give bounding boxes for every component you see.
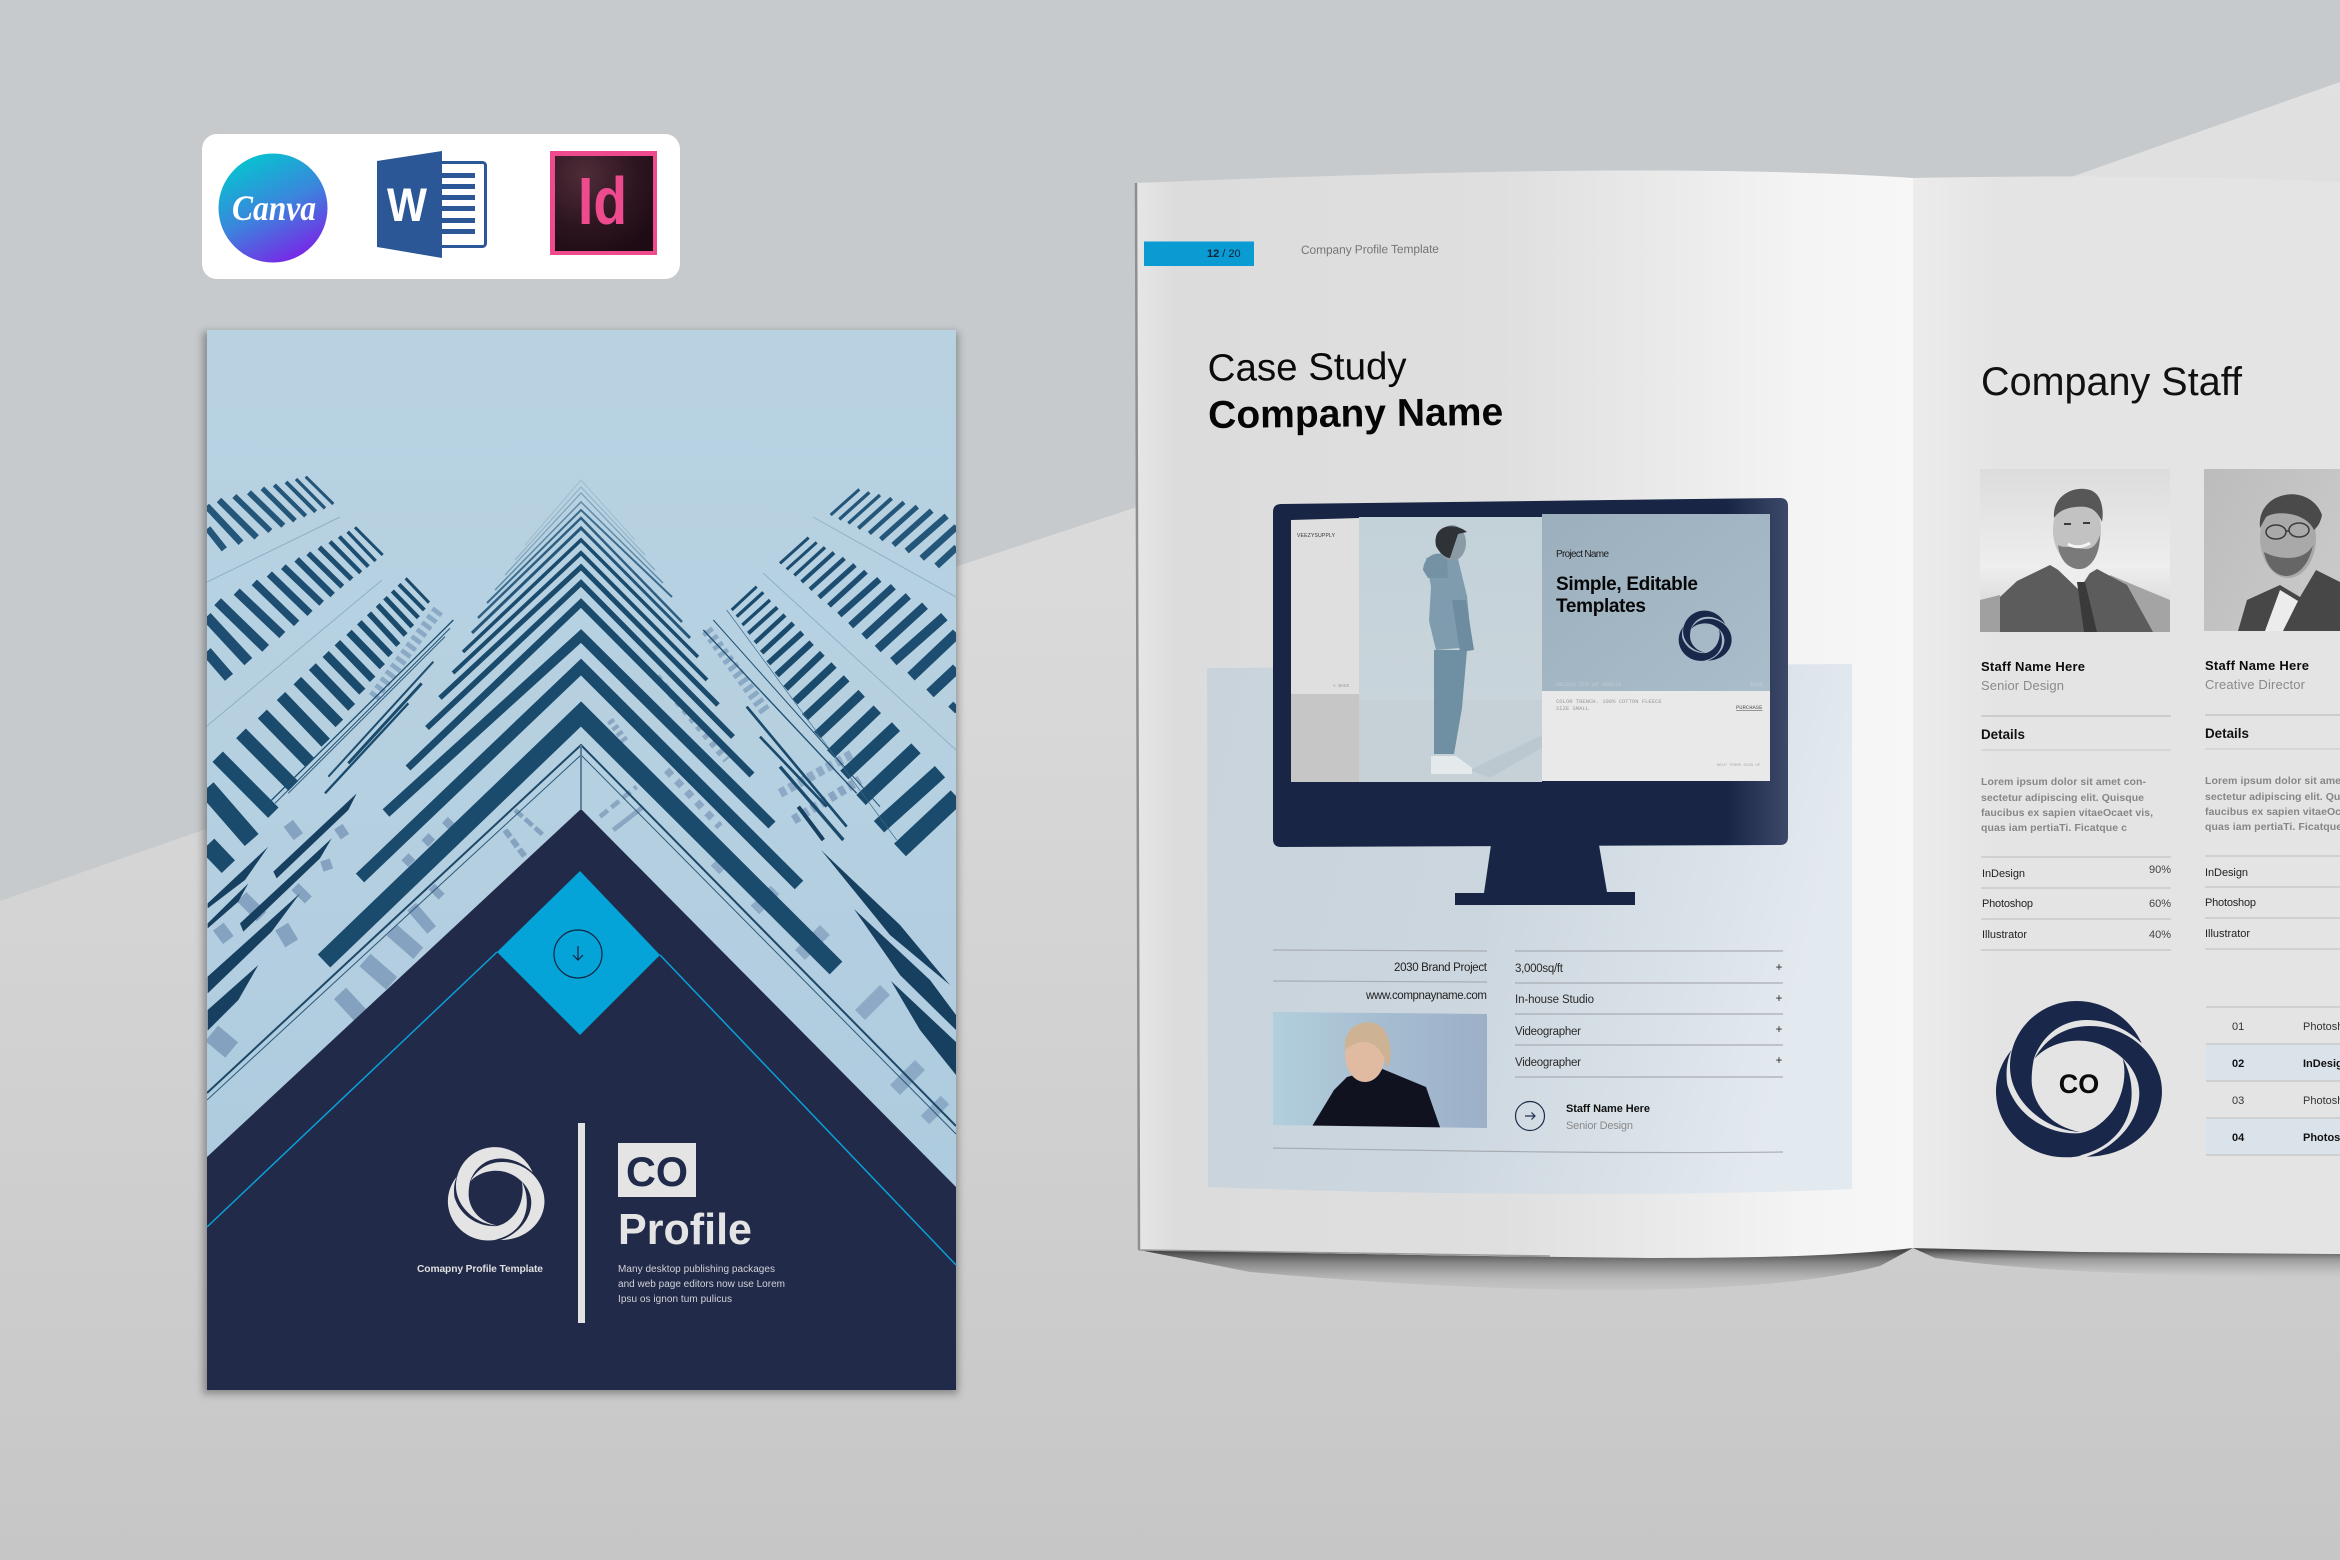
left tower windows — [207, 477, 429, 867]
facade lines — [207, 517, 956, 750]
pale blue panel — [1207, 664, 1852, 1194]
page tab: 12 / 20 — [1207, 248, 1241, 260]
staff 1 details: quas iam pertiaTi. Ficatque c — [1981, 822, 2127, 834]
right page heading: Company Staff — [1981, 360, 2243, 404]
staff credit: Staff Name Here — [1566, 1103, 1650, 1115]
spike shadows right — [821, 850, 956, 1075]
project details right column: + — [1776, 962, 1783, 974]
staff 2 skills: Illustrator — [2205, 928, 2250, 940]
heading: Case Study — [1207, 344, 1503, 437]
icon: arrow circle — [1516, 1102, 1544, 1130]
screen copy: SIZE SMALL — [1556, 705, 1589, 712]
project details right column: In-house Studio — [1515, 994, 1594, 1006]
monitor stand — [1455, 845, 1635, 905]
CO badge: CO — [626, 1148, 688, 1195]
staff 1 skills: InDesign — [1982, 868, 2025, 880]
cover shadow — [203, 332, 958, 1394]
icon: InDesign — [550, 151, 657, 255]
spike shadows left — [208, 793, 357, 1031]
panel: right page — [1913, 177, 2340, 1254]
booklet shadow — [1139, 1248, 2340, 1290]
staff table: 01 — [2232, 1021, 2244, 1033]
screen copy: PURCHASE — [1736, 704, 1763, 711]
staff 1 role: Senior Design — [1981, 678, 2064, 693]
running header: Company Profile Template — [1301, 242, 1439, 257]
staff 1 skills: 90% — [2149, 864, 2171, 876]
staff 2 details: Details — [2205, 726, 2249, 741]
page tab — [1144, 242, 1254, 266]
screen copy: HELP TERMS SIGN UP — [1717, 764, 1761, 768]
screen copy — [1297, 533, 1763, 768]
icon: Word — [377, 151, 486, 258]
screen: Project Name — [1556, 549, 1609, 560]
staff table: 02 — [2232, 1058, 2244, 1070]
staff 1 skills: 60% — [2149, 898, 2171, 910]
project details right column: Videographer — [1515, 1026, 1581, 1038]
staff 1 name: Staff Name Here — [1981, 659, 2085, 674]
heading: Case Study: Company Name — [1208, 391, 1503, 437]
lower facade window blocks left — [212, 810, 545, 1050]
screen: Simple, Editable — [1556, 574, 1698, 595]
project details left column: 2030 Brand Project — [1394, 962, 1488, 974]
right tower windows — [732, 489, 957, 850]
staff 1 details: sectetur adipiscing elit. Quisque — [1981, 792, 2144, 804]
cover tagline: Comapny Profile Template — [417, 1264, 543, 1275]
cyan lines — [207, 952, 956, 1265]
panel: left page — [1136, 171, 1913, 1258]
cover description: Many desktop publishing packages — [618, 1264, 775, 1275]
monitor — [1273, 498, 1788, 905]
staff credit: Senior Design — [1566, 1120, 1633, 1132]
small logo on screen — [1679, 611, 1732, 661]
staff table: 03 — [2232, 1095, 2244, 1107]
navy chevron — [207, 809, 956, 1390]
project details right column: Videographer — [1515, 1057, 1581, 1069]
panel: brochure cover — [207, 330, 957, 1390]
staff 1 skills: 40% — [2149, 929, 2171, 941]
project details right column: 3,000sq/ft — [1515, 963, 1564, 975]
staff 2 name: Staff Name Here — [2205, 658, 2309, 673]
staff 2 skills: InDesign — [2205, 867, 2248, 879]
screen copy: < BACK — [1333, 683, 1350, 689]
staff 2 role: Creative Director — [2205, 677, 2306, 692]
icon: InDesign: Id — [578, 164, 627, 239]
project details left column: www.compnayname.com — [1365, 990, 1487, 1002]
cover photo: skyscraper — [207, 330, 956, 1187]
project details right column: + — [1776, 993, 1783, 1005]
project details right column: + — [1776, 1055, 1783, 1067]
CO logo large: CO — [2059, 1069, 2099, 1099]
staff 2 details — [2205, 715, 2340, 833]
cover title: Profile — [618, 1205, 752, 1254]
staff credit — [1566, 1103, 1650, 1132]
staff 1 skills — [1981, 857, 2171, 950]
corner edge lines — [207, 745, 956, 1134]
staff table — [2206, 1007, 2340, 1155]
cyan diamond — [497, 871, 660, 1035]
cover description: Ipsu os ignon tum pulicus — [618, 1294, 732, 1305]
icon: Canva: Canva — [232, 188, 316, 228]
cover description: and web page editors now use Lorem — [618, 1279, 785, 1290]
central tower chevrons — [324, 480, 836, 968]
window tiles and reflections right — [600, 610, 897, 840]
staff photo 2 — [2204, 469, 2340, 631]
staff photo 1 — [1980, 469, 2170, 632]
staff 1 details: Details — [1981, 727, 2025, 742]
project photo — [1273, 1012, 1487, 1130]
icon: down arrow circle — [554, 930, 602, 978]
screen copy: UNISEX ZIP-UP HOODIE — [1556, 681, 1623, 688]
staff 1 skills: Photoshop — [1982, 898, 2033, 910]
screen copy: $368 — [1750, 681, 1763, 688]
staff 1 details — [1981, 716, 2171, 834]
heading: Case Study: Case Study — [1207, 345, 1408, 390]
staff 1 details: faucibus ex sapien vitaeOcaet vis, — [1981, 807, 2153, 819]
project details left column — [1273, 950, 1488, 1002]
screen copy: COLOR TRENCH. 100% COTTON FLEECE — [1556, 698, 1662, 705]
staff 1 details: Lorem ipsum dolor sit amet con- — [1981, 776, 2146, 788]
logo badge panel — [202, 134, 680, 279]
icon: Canva — [218, 154, 328, 262]
cover divider — [578, 1123, 585, 1323]
icon: Word: W — [387, 178, 428, 231]
screen — [1291, 514, 1770, 782]
staff 2 skills: Photoshop — [2205, 897, 2256, 909]
lower facade windows right — [715, 853, 945, 1120]
staff 1 skills: Illustrator — [1982, 929, 2027, 941]
CO logo large — [1996, 1001, 2162, 1157]
screen: Templates — [1556, 596, 1646, 617]
cover logo — [448, 1147, 544, 1240]
cover description — [618, 1264, 785, 1305]
staff table: 04 — [2232, 1132, 2245, 1144]
project details right column — [1515, 951, 1783, 1077]
project details right column: + — [1776, 1024, 1783, 1036]
screen photo — [1359, 517, 1542, 782]
screen copy: VEEZYSUPPLY — [1297, 533, 1336, 539]
monitor body — [1273, 498, 1788, 847]
window tiles and reflections left — [265, 610, 453, 807]
staff 2 skills — [2205, 856, 2340, 949]
